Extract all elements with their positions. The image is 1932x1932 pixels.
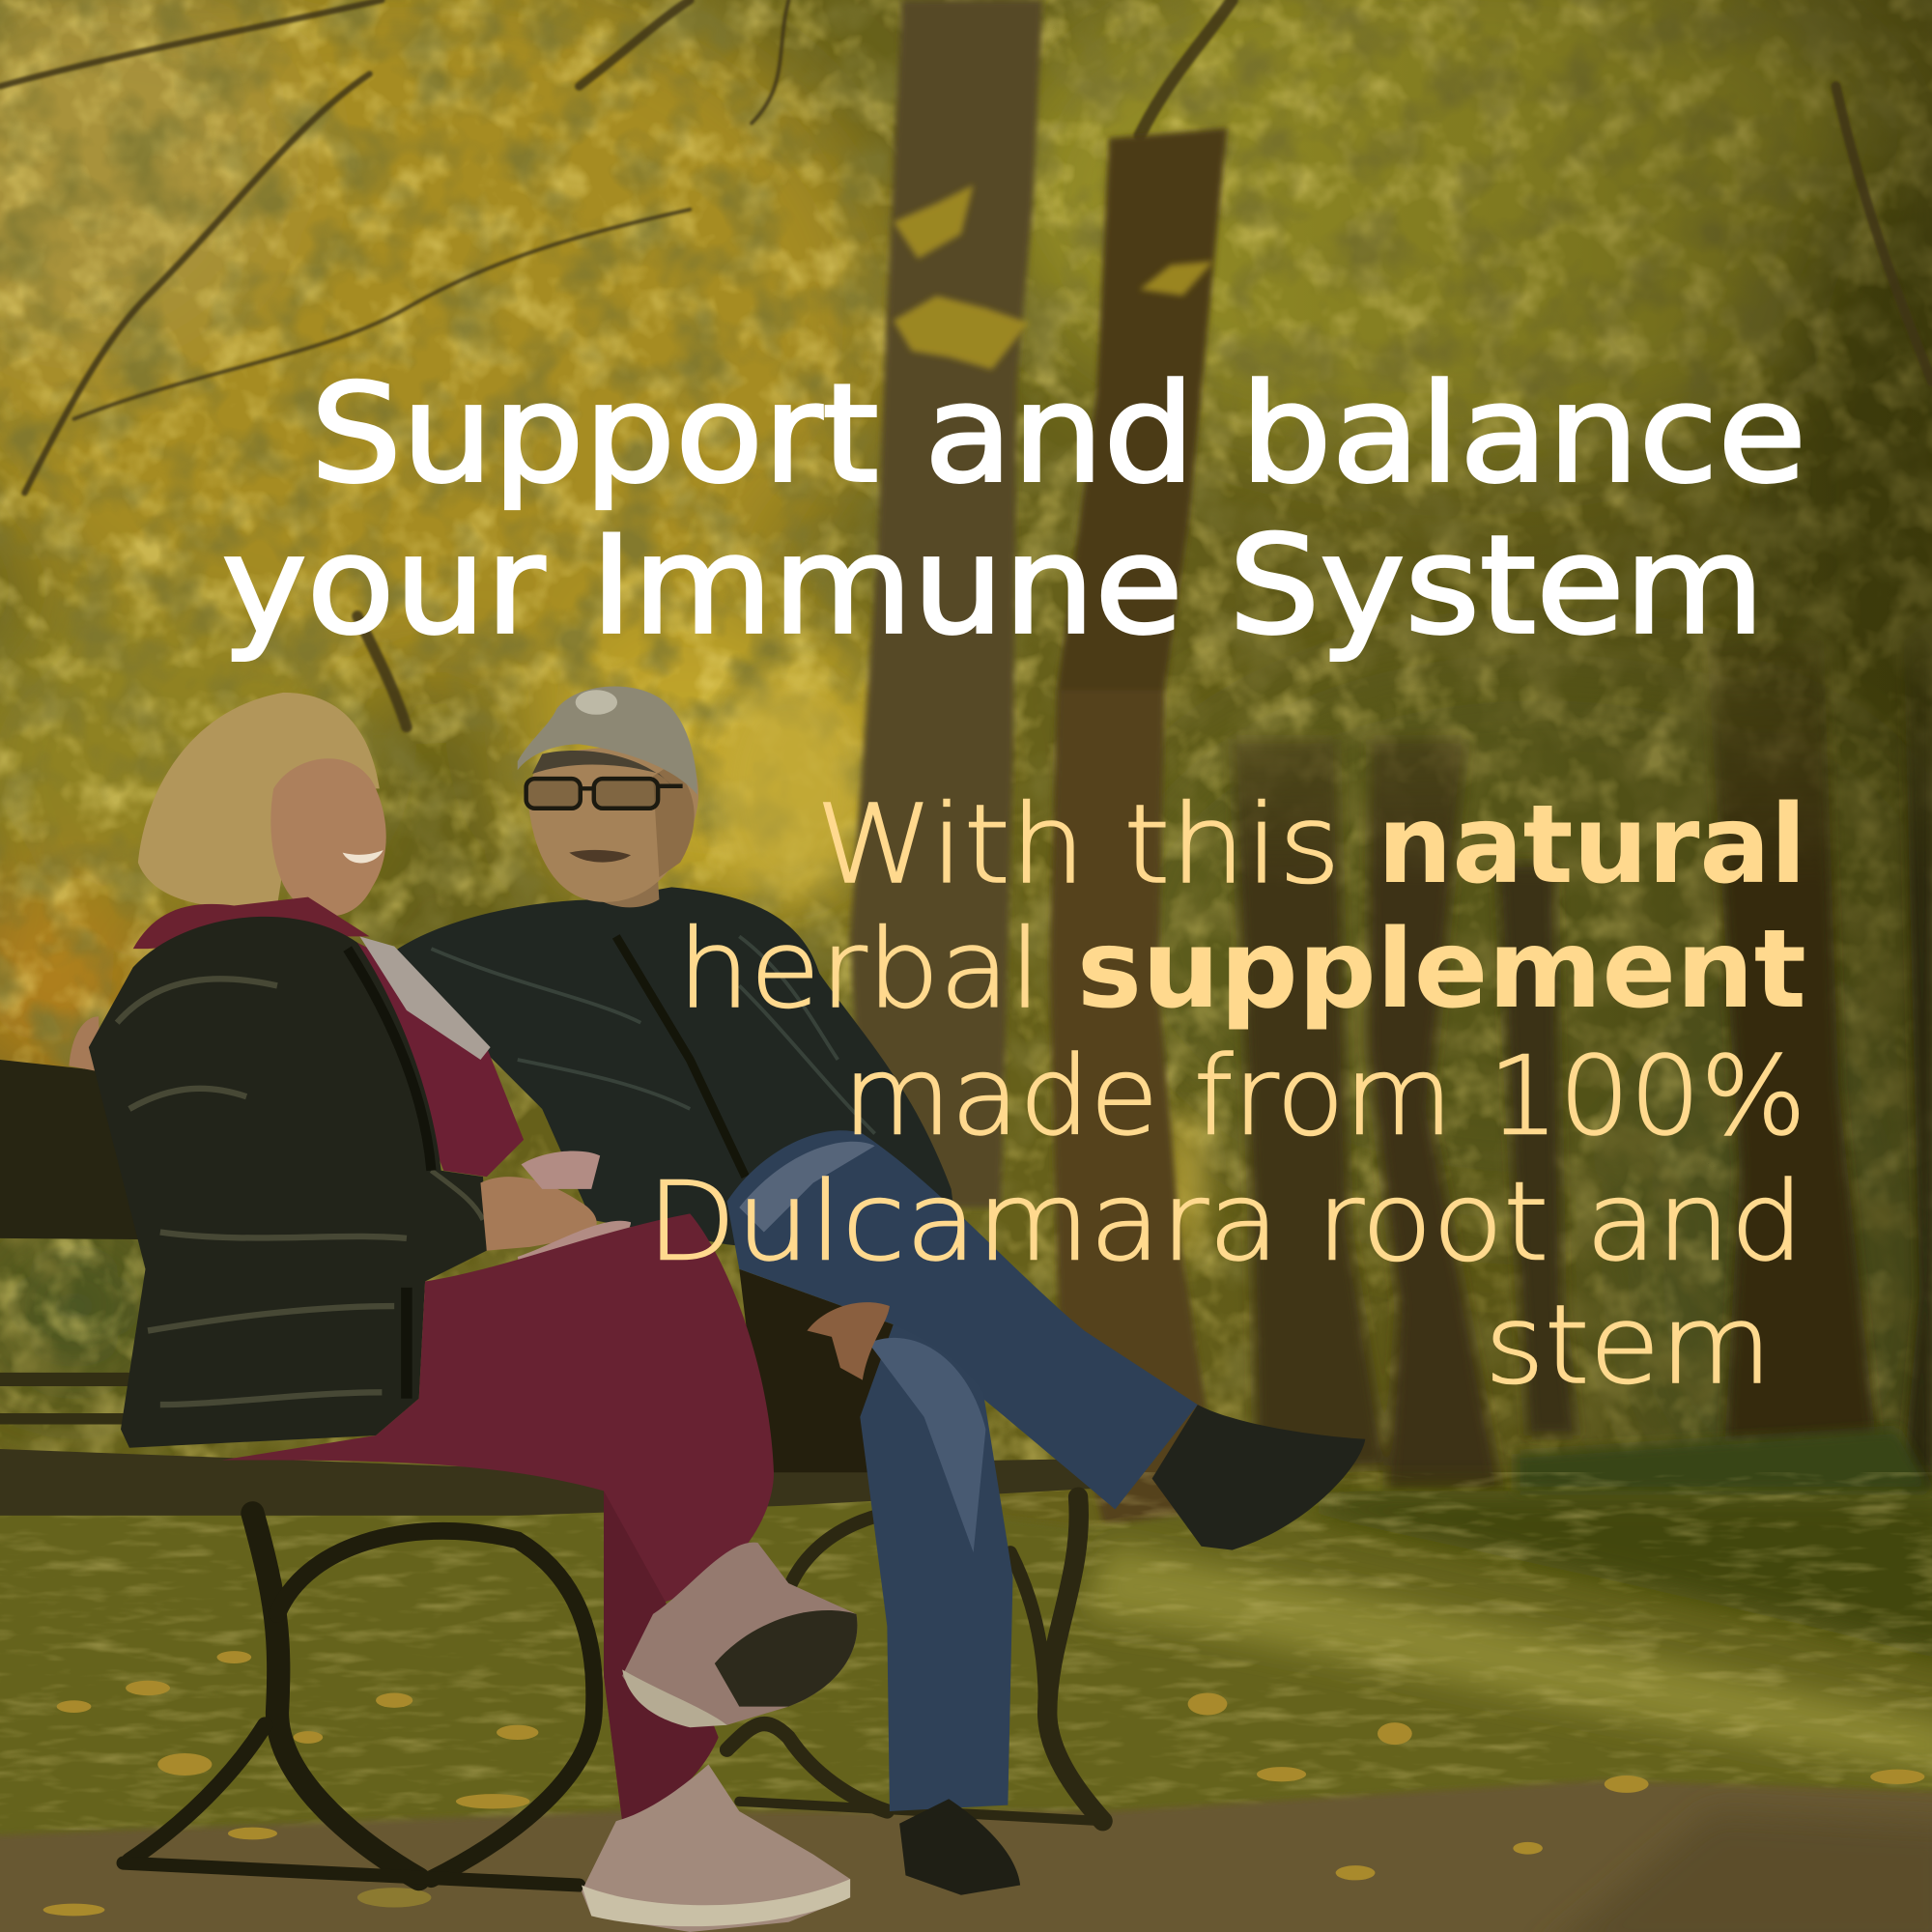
bench rear rails	[0, 1373, 129, 1424]
line: herbal: herbal	[678, 907, 1041, 1033]
bench	[0, 1060, 1103, 1886]
line: Dulcamara root and: Dulcamara root and	[647, 1160, 1804, 1286]
man cap	[518, 686, 697, 795]
man hand	[807, 1302, 890, 1380]
background: distant dark tree trunks	[1233, 616, 1932, 1540]
man neck and face	[554, 801, 659, 907]
background: grass	[0, 1430, 1932, 1836]
woman lower shoe	[582, 1765, 850, 1932]
background: bright foliage near trunks	[715, 678, 1203, 1257]
woman trousers	[222, 1213, 774, 1821]
woman hat in hands	[518, 1151, 631, 1282]
background: gravel path	[0, 1780, 1932, 1932]
line: With this: With this	[815, 782, 1341, 908]
man glasses	[526, 779, 683, 809]
woman hands	[480, 1177, 597, 1251]
man thigh shadow	[739, 1269, 894, 1472]
woman face	[270, 758, 386, 916]
background: central tree trunks	[850, 0, 1227, 1550]
line: natural: natural	[1378, 782, 1806, 908]
line: supplement: supplement	[1077, 907, 1806, 1033]
woman shirt	[357, 943, 524, 1177]
background: leaves over trunk	[894, 185, 1213, 370]
headline line 2: your Immune System	[222, 507, 1765, 665]
woman	[69, 693, 857, 1932]
man	[394, 686, 1365, 1895]
bench seat	[0, 1449, 1094, 1516]
bench frame left	[124, 1513, 594, 1886]
bench backrest	[0, 1060, 154, 1239]
man jeans	[727, 1130, 1198, 1509]
bench frame right	[727, 1497, 1103, 1821]
woman upper shoe	[622, 1543, 857, 1725]
man shoes	[1152, 1405, 1365, 1550]
line: stem: stem	[1485, 1283, 1772, 1408]
background: fallen leaves	[43, 1651, 1924, 1916]
headline line 1: Support and balance	[310, 355, 1806, 513]
woman hair	[138, 693, 380, 908]
subheading paragraph	[647, 782, 1806, 1408]
woman scarf	[133, 897, 370, 949]
background: tree branches	[0, 0, 1932, 727]
woman jacket	[89, 917, 487, 1448]
woman arm behind bench	[69, 1016, 101, 1072]
line: made from 100%: made from 100%	[842, 1034, 1806, 1159]
man jacket	[394, 887, 961, 1269]
headline	[222, 355, 1806, 665]
